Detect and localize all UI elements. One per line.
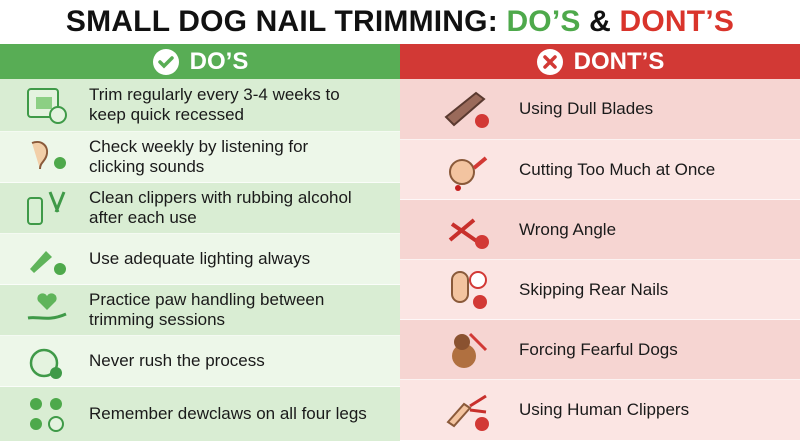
header: do's [0, 44, 400, 79]
dont 2 [400, 140, 800, 200]
dont 6 [400, 380, 800, 440]
do 3 [0, 183, 400, 234]
do 7: Remember dewclaws on all four legs [89, 404, 367, 423]
do 3: Clean clippers with rubbing alcohol [89, 188, 352, 207]
dont 4 [400, 260, 800, 320]
do 5: trimming sessions [89, 310, 225, 329]
do 2 [0, 132, 400, 183]
dont 1 [400, 79, 800, 140]
do 4: Use adequate lighting always [89, 249, 310, 268]
dont 4: Skipping Rear Nails [519, 280, 668, 298]
panel: do's [0, 79, 400, 441]
header: dont's [400, 44, 800, 79]
dont 5: Forcing Fearful Dogs [519, 340, 678, 358]
do 1 [0, 79, 400, 132]
dont 2: Cutting Too Much at Once [519, 160, 715, 178]
dont 3 [400, 200, 800, 260]
title: SMALL DOG NAIL TRIMMING: DO’S & DONT’S [66, 5, 734, 38]
dont 1: Using Dull Blades [519, 99, 653, 118]
header: do's: DO’S [190, 48, 248, 74]
do 2: Check weekly by listening for [89, 137, 308, 156]
do 6: Never rush the process [89, 351, 265, 370]
do 5 [0, 285, 400, 336]
dont 3: Wrong Angle [519, 220, 616, 238]
do 1: Trim regularly every 3-4 weeks to [89, 85, 340, 104]
do 6 [0, 336, 400, 387]
panel: dont's [400, 79, 800, 440]
header: dont's: DONT’S [574, 48, 664, 74]
do 2: clicking sounds [89, 157, 204, 176]
dont 6: Using Human Clippers [519, 400, 689, 419]
do 5: Practice paw handling between [89, 290, 324, 309]
dont 5 [400, 320, 800, 380]
do 4 [0, 234, 400, 285]
do 3: after each use [89, 208, 197, 227]
do 7 [0, 387, 400, 441]
do 1: keep quick recessed [89, 105, 244, 124]
